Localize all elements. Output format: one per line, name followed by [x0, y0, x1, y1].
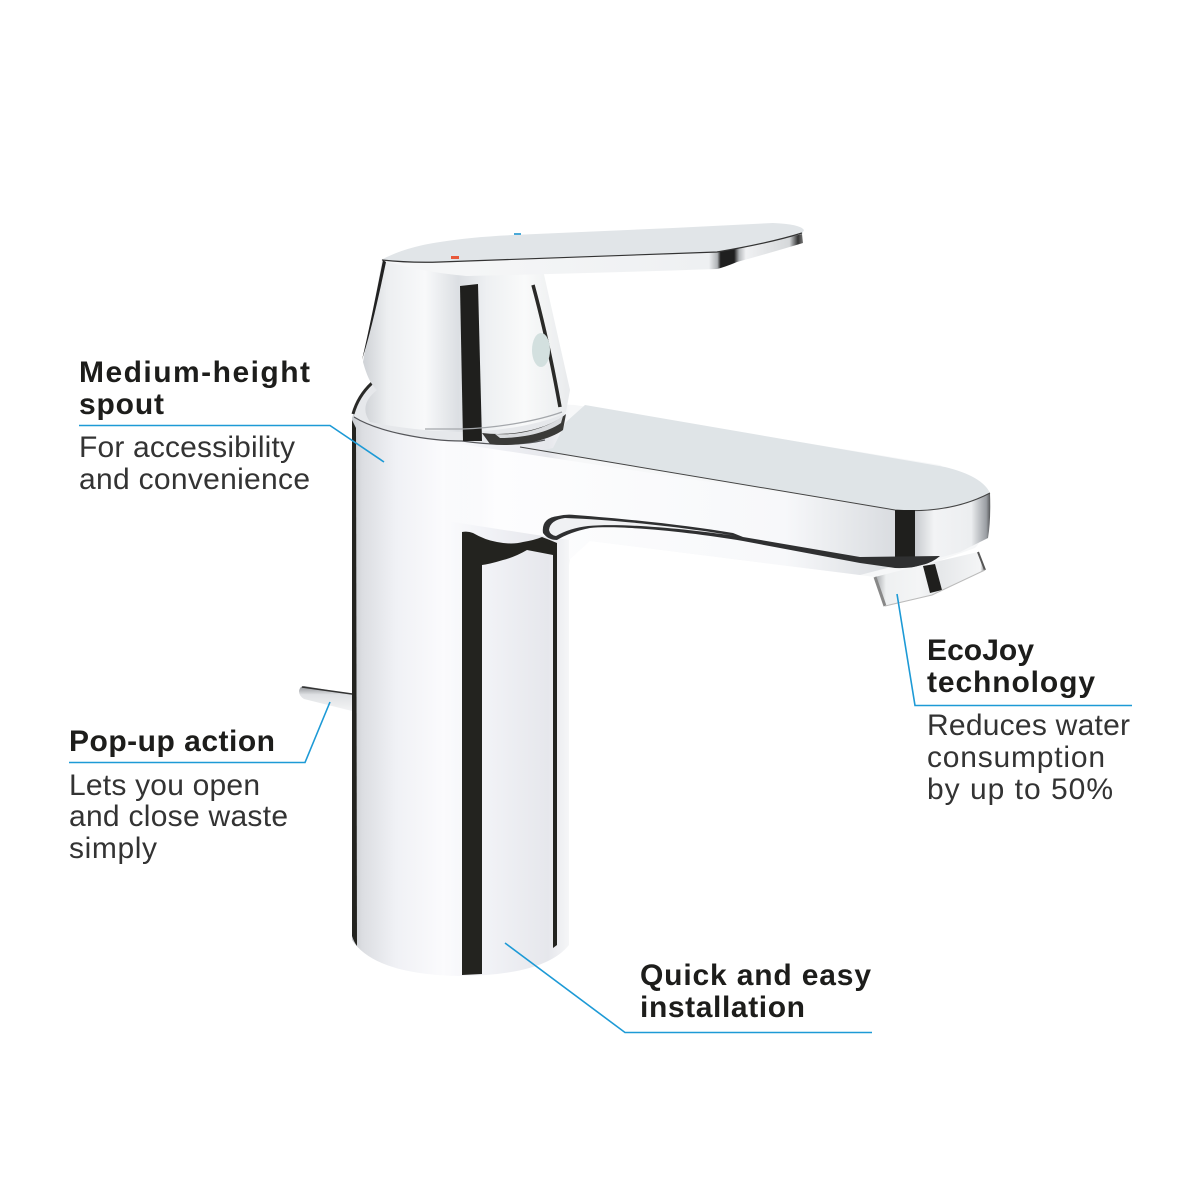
callout: pop-up action: [69, 702, 330, 865]
description: Reduces water: [927, 709, 1130, 742]
callout: EcoJoy technology: [897, 594, 1132, 806]
faucet illustration: [299, 223, 990, 976]
hot indicator: [451, 256, 459, 259]
heading: Medium-height: [79, 356, 310, 389]
underside shadow and highlight: [543, 515, 940, 568]
callout: medium-height spout: [79, 356, 384, 496]
description: Lets you open: [69, 769, 260, 802]
lever: [382, 234, 803, 276]
handle cone: [363, 261, 570, 432]
heading: EcoJoy: [927, 634, 1034, 667]
callout: pop-up action: simply: [69, 832, 157, 865]
leader line: [69, 702, 330, 762]
faucet body and spout: [352, 385, 990, 976]
callout: medium-height spout: and convenience: [79, 463, 310, 496]
leader line: [505, 943, 872, 1032]
base dome: [353, 383, 566, 443]
callout: EcoJoy technology: consumption: [927, 741, 1105, 774]
callout: EcoJoy technology: by up to 50%: [927, 773, 1113, 806]
description: For accessibility: [79, 431, 295, 464]
cold indicator: [514, 233, 521, 235]
column reflections: [352, 420, 357, 946]
indicator button: [532, 333, 550, 367]
leader line: [897, 594, 1132, 706]
heading: Pop-up action: [69, 725, 275, 758]
handle: [353, 223, 804, 445]
callout: quick and easy installation: installation: [640, 991, 805, 1024]
callout: EcoJoy technology: technology: [927, 666, 1095, 699]
callout: quick and easy installation: [505, 943, 872, 1032]
aerator: [875, 552, 985, 606]
callout: pop-up action: and close waste: [69, 800, 288, 833]
heading: Quick and easy: [640, 959, 871, 992]
top plate of spout: [540, 405, 990, 511]
callout: medium-height spout: spout: [79, 388, 164, 421]
pop-up rod: [299, 686, 352, 711]
leader line: [79, 426, 384, 462]
